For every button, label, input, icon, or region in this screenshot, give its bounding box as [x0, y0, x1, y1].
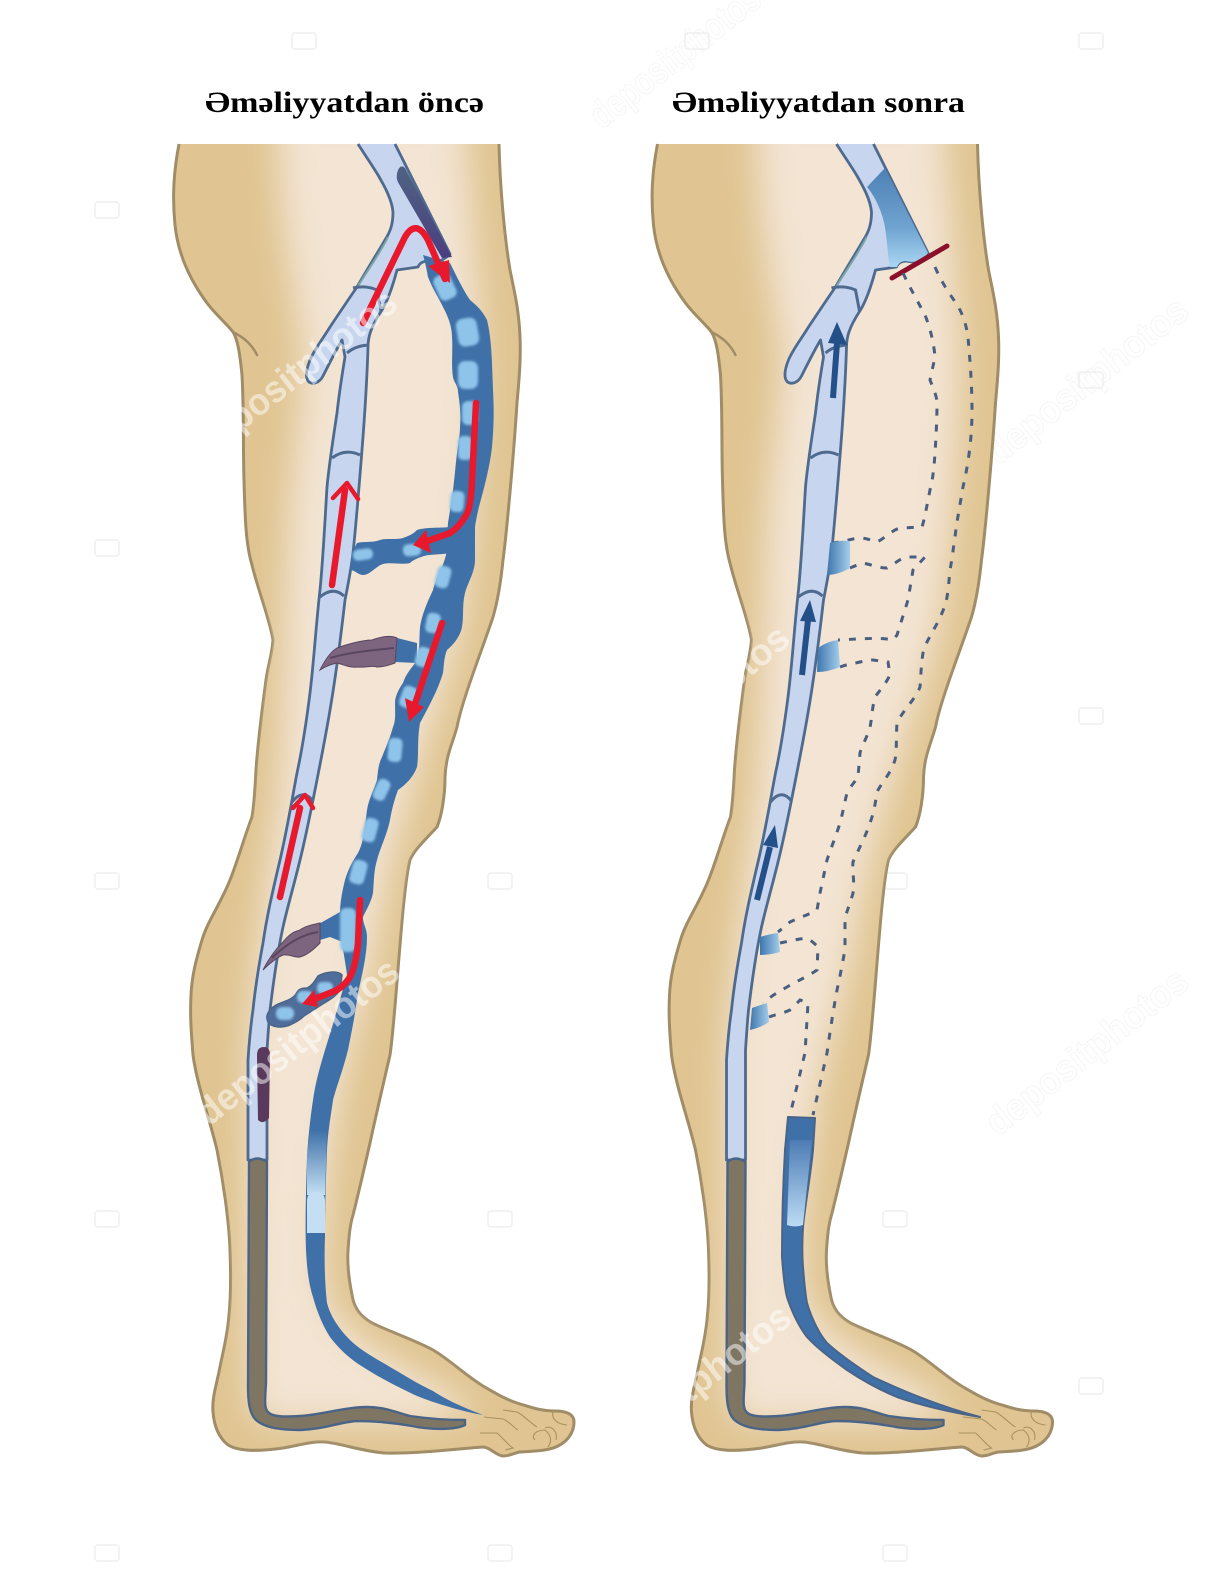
watermark over legs: depositphotos: [187, 281, 406, 465]
blue flow arrows: [757, 322, 847, 900]
title: after surgery: Əməliyyatdan sonra: [672, 86, 965, 119]
background watermark: depositphotos: [978, 289, 1197, 473]
perforator stumps: [750, 541, 850, 1030]
removed veins dashed lines: [763, 267, 972, 1115]
panel: leg after surgery: [652, 110, 1052, 1456]
lower saphenous vein remnant: [782, 1117, 980, 1417]
watermark over legs: depositphotos: [189, 950, 408, 1134]
red arrow: down thigh to perforator: [413, 403, 476, 553]
background watermark: depositphotos: [978, 960, 1197, 1144]
blue arrow: upper thigh: [828, 322, 847, 398]
vein valve bulbs: [276, 271, 480, 1020]
watermark over legs: depositphotos: [576, 617, 798, 813]
femoral dark segment: [397, 166, 452, 258]
varicose great saphenous vein: [306, 255, 494, 1415]
title: before surgery: Əməliyyatdan öncə: [205, 86, 484, 119]
red flow arrows: [280, 228, 476, 1007]
thrombus in calf vein: [257, 1047, 270, 1122]
panel: leg before surgery: [174, 110, 574, 1456]
watermark over legs: [187, 281, 800, 1483]
red arrow: up deep vein thigh: [332, 483, 358, 585]
red arrow: up deep vein calf: [280, 795, 313, 897]
blue arrow: calf: [757, 825, 778, 900]
perforator stubs and thrombosed branches: [263, 637, 417, 1027]
red arrow: knee to side branch: [302, 900, 360, 1007]
ligation mark: [892, 246, 947, 278]
watermark over legs: depositphotos: [577, 1296, 800, 1483]
blue arrow: mid thigh: [800, 600, 816, 675]
red arrow: reflux at junction: [363, 228, 450, 323]
femoral stump shading: [867, 168, 928, 267]
red arrow: down lower thigh: [405, 623, 442, 722]
